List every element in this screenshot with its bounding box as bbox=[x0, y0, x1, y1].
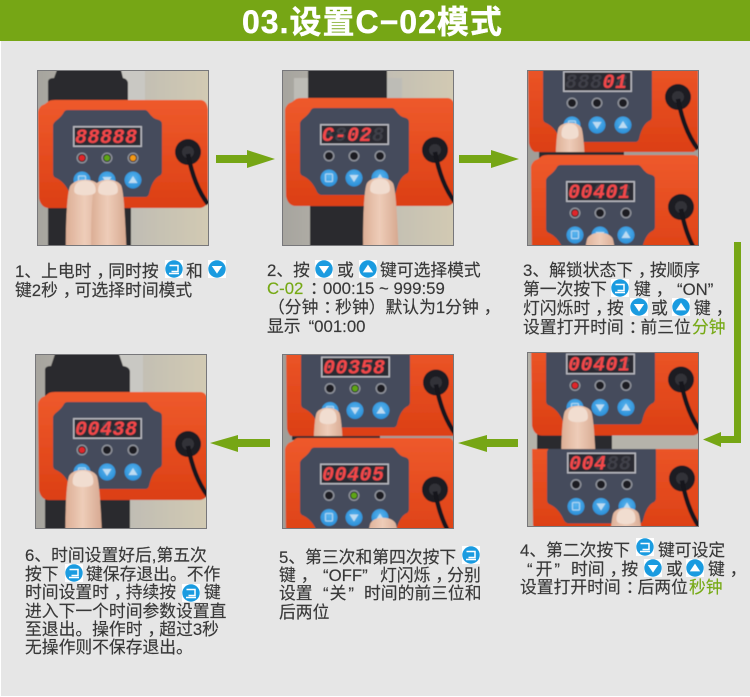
step 6 text bbox=[25, 546, 227, 657]
photo 1: pressing save and down keys: 88888 bbox=[75, 127, 137, 150]
photo 3: unlock, first press: 88888 bbox=[568, 182, 630, 205]
step 4 text: 秒钟 bbox=[689, 578, 723, 597]
photo 3: unlock, first press: 88888 bbox=[565, 72, 627, 95]
step 5 text bbox=[279, 546, 481, 622]
arrow: step 1 to 2 bbox=[216, 150, 275, 168]
photo 6: saving and exit: 00438 bbox=[75, 419, 137, 442]
step 3 text: 设置打开时间 ：前三位 bbox=[523, 318, 691, 337]
step 4 text: 键可设定 bbox=[658, 541, 725, 560]
step 3 text bbox=[523, 261, 733, 337]
step 6 text: 键保存退出。不作 bbox=[86, 565, 220, 584]
step 1 text: 1、上电时 ，同时按 bbox=[15, 262, 159, 281]
photo 4: second press: 88888 bbox=[568, 354, 630, 378]
step 2 text: 键可选择模式 bbox=[380, 261, 481, 280]
step 5 text: 设置 bbox=[279, 584, 313, 603]
title: 03.设置C−02模式 bbox=[242, 4, 503, 40]
step 2 text: 显示 “001:00 bbox=[267, 317, 366, 336]
step 1 text: 键2秒 ，可选择时间模式 bbox=[15, 281, 192, 300]
header bar with title bbox=[0, 0, 750, 41]
step 4 text: 时间 ，按 bbox=[571, 560, 638, 579]
step 3 text: 灯闪烁时 ，按 bbox=[523, 299, 624, 318]
step 2 text: 2、按 bbox=[267, 261, 310, 280]
step 2 text: （分钟 ：秒钟）默认为1分钟 ， bbox=[268, 298, 501, 317]
step 2 text: 000:15 ~ 999:59 bbox=[323, 279, 445, 298]
step 3 text: 3、解锁状态下 ，按顺序 bbox=[523, 261, 700, 280]
step 3 text: 或 bbox=[651, 299, 668, 318]
step 4 text: “开” bbox=[527, 560, 560, 579]
step 3 text: 第一次按下 bbox=[523, 280, 607, 299]
step 2 text: C-02 bbox=[267, 279, 303, 298]
step 3 text: 分钟 bbox=[692, 318, 726, 337]
arrow: step 5 to 6 bbox=[210, 435, 270, 452]
photo 4: second press: 004 bbox=[569, 454, 606, 476]
photo 3: unlock, first press: 00401 bbox=[568, 182, 630, 205]
photo 5: third and fourth press: 88888 bbox=[323, 358, 385, 380]
step 1 text bbox=[15, 260, 226, 300]
photo 3: unlock, first press: 01 bbox=[602, 72, 627, 95]
step 4 text: 键 ， bbox=[708, 560, 747, 579]
step 6 text: 时间设置时 ，持续按 bbox=[25, 583, 176, 602]
step 2 text: ： bbox=[310, 279, 327, 298]
step 6 text: 按下 bbox=[25, 565, 59, 584]
step 1 text: 和 bbox=[186, 262, 203, 281]
arrow: step 4 to 5 bbox=[458, 435, 518, 452]
step 6 text: 6、时间设置好后,第五次 bbox=[25, 546, 207, 565]
step 2 text: 或 bbox=[337, 261, 354, 280]
photo 4: second press bbox=[528, 353, 698, 526]
step 6 text: 无操作则不保存退出。 bbox=[25, 638, 193, 657]
photo 4: second press: 00401 bbox=[568, 354, 630, 378]
step 4 text bbox=[520, 538, 747, 597]
photo 2: selecting mode C-02: 88888 bbox=[322, 125, 384, 148]
step 5 text: 灯闪烁 ，分别 bbox=[380, 566, 481, 585]
step 5 text: “关” bbox=[323, 584, 354, 603]
step 5 text: 键 ， bbox=[279, 566, 318, 585]
photo 5: third and fourth press: 00358 bbox=[323, 358, 385, 380]
step 4 text: 或 bbox=[666, 560, 683, 579]
step 4 text: 4、第二次按下 bbox=[520, 541, 630, 560]
photo 2: selecting mode C-02: C02 bbox=[322, 125, 372, 148]
step 6 text: 进入下一个时间参数设置直 bbox=[25, 602, 227, 621]
photo 2: selecting mode C-02: - bbox=[334, 125, 347, 148]
step 3 text: 键 ， bbox=[634, 280, 673, 299]
step 3 text: 键 ， bbox=[694, 299, 733, 318]
step 3 text: “ON” bbox=[677, 280, 713, 299]
step 5 text: 时间的前三位和 bbox=[364, 584, 481, 603]
photo 1: pressing save and down keys: 88888 bbox=[75, 127, 137, 150]
step 4 text: 设置打开时间 ：后两位 bbox=[520, 578, 688, 597]
photo 1: pressing save and down keys bbox=[38, 71, 208, 245]
step 2 text bbox=[267, 260, 501, 336]
step 5 text: 5、第三次和第四次按下 bbox=[279, 548, 456, 567]
step 6 text: 键 bbox=[204, 583, 221, 602]
photo 6: saving and exit: 88888 bbox=[75, 419, 137, 442]
arrow: step 2 to 3 bbox=[459, 150, 519, 168]
step 6 text: 至退出。操作时 ，超过3秒 bbox=[25, 620, 219, 639]
photo 6: saving and exit bbox=[36, 355, 206, 528]
photo 2: selecting mode C-02 bbox=[283, 71, 453, 245]
step 5 text: “OFF” bbox=[323, 566, 368, 585]
photo 4: second press: 88888 bbox=[569, 454, 631, 476]
step 5 text: 后两位 bbox=[279, 603, 330, 622]
arrow: step 3 to 4 bbox=[703, 242, 741, 447]
photo 3: unlock, first press bbox=[528, 71, 698, 245]
photo 5: third and fourth press: 88888 bbox=[322, 464, 384, 488]
photo 5: third and fourth press bbox=[283, 355, 453, 528]
photo 5: third and fourth press: 00405 bbox=[322, 464, 384, 488]
